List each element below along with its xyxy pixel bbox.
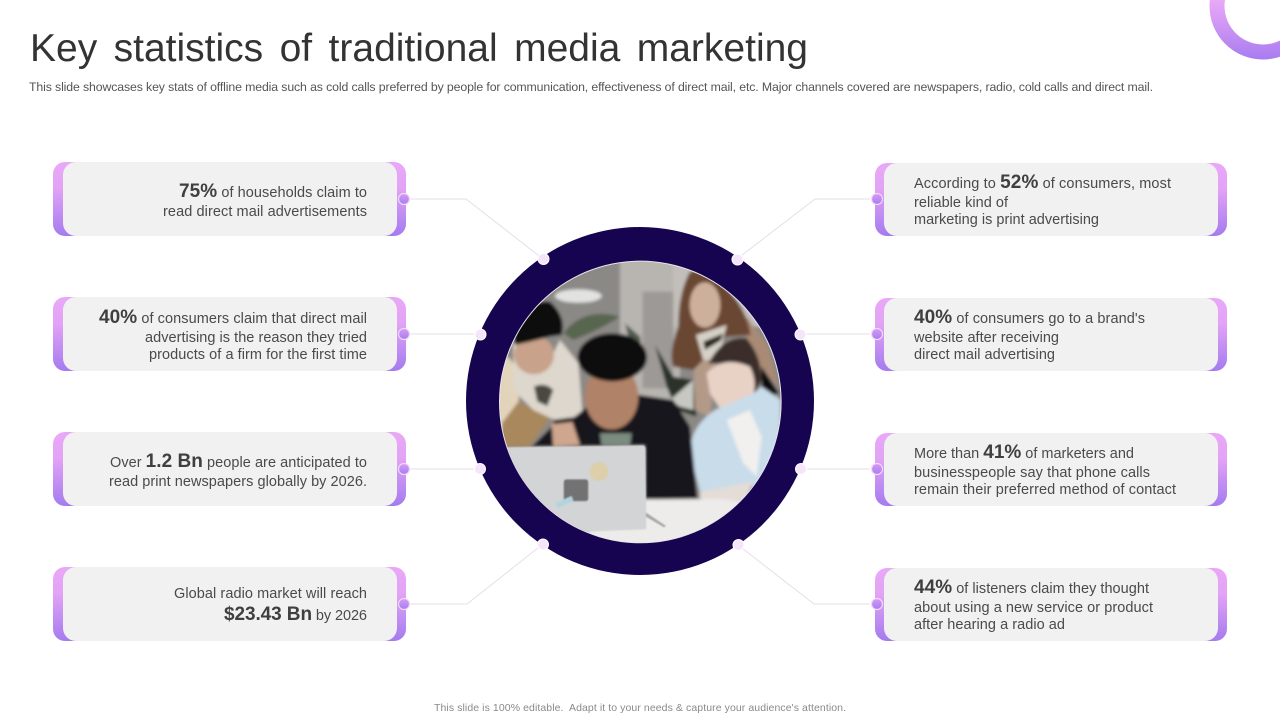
card: 44% radio ad: 44% of listeners claim they thought xyxy=(914,577,1149,598)
blonde person left xyxy=(500,356,521,429)
card: 40% tried products: 40% of consumers claim that direct mail xyxy=(99,307,367,328)
footer note: This slide is 100% editable. Adapt it to your needs & capture your audience's attention. xyxy=(434,702,846,714)
card: 52% print advertising: marketing is print advertising xyxy=(914,212,1099,228)
card: radio market xyxy=(53,567,410,641)
card: 40% website: website after receiving xyxy=(913,330,1059,346)
card: 44% radio ad xyxy=(872,568,1227,641)
card: 75% households: 75% of households claim to xyxy=(179,181,367,202)
ring connector dots xyxy=(474,254,806,550)
card: radio market: Global radio market will reach xyxy=(174,586,367,602)
card: 41% phone calls: remain their preferred method of contact xyxy=(914,482,1176,498)
card: 44% radio ad: after hearing a radio ad xyxy=(914,617,1065,633)
card: 52% print advertising: reliable kind of xyxy=(914,195,1009,211)
card: 40% tried products: products of a firm for the first time xyxy=(149,347,367,363)
card: 1.2 Bn newspapers: read print newspapers globally by 2026. xyxy=(109,474,367,490)
card: 40% tried products xyxy=(53,297,410,371)
decorative corner arc xyxy=(1217,0,1280,52)
navy ring xyxy=(466,227,814,575)
laptop xyxy=(493,445,666,532)
card: 75% households xyxy=(53,162,410,236)
card: 41% phone calls: businesspeople say that phone calls xyxy=(914,465,1150,481)
central photo ring xyxy=(466,227,814,575)
subtitle description: This slide showcases key stats of offline media such as cold calls preferred by people for communication, effectiveness of direct mail, etc. Major channels covered are newspapers, radio, cold calls and direct mail. xyxy=(29,80,1153,94)
card: 52% print advertising: According to 52% of consumers, most xyxy=(914,172,1171,193)
card: 1.2 Bn newspapers xyxy=(53,432,410,506)
table xyxy=(586,496,739,542)
card: 44% radio ad: about using a new service or product xyxy=(914,600,1153,616)
photo: team around a laptop xyxy=(499,260,782,544)
right woman xyxy=(762,367,779,397)
card: 75% households: read direct mail advertisements xyxy=(163,204,367,220)
curly-haired woman xyxy=(747,317,778,387)
connector lines xyxy=(410,199,870,604)
card: 41% phone calls xyxy=(872,433,1227,506)
card: radio market: $23.43 Bn by 2026 xyxy=(224,604,367,625)
card: 52% print advertising xyxy=(872,163,1227,236)
card: 40% website: direct mail advertising xyxy=(914,347,1055,363)
card: 40% website xyxy=(872,298,1227,371)
card: 40% website: 40% of consumers go to a brand's xyxy=(914,307,1145,328)
card: 1.2 Bn newspapers: Over 1.2 Bn people are anticipated to xyxy=(110,451,367,472)
title: Key statistics of traditional media marketing xyxy=(30,27,808,70)
card: 40% tried products: advertising is the reason they tried xyxy=(145,330,367,346)
centre man xyxy=(532,395,697,500)
man pointing xyxy=(513,337,583,420)
card: 41% phone calls: More than 41% of marketers and xyxy=(914,442,1134,463)
